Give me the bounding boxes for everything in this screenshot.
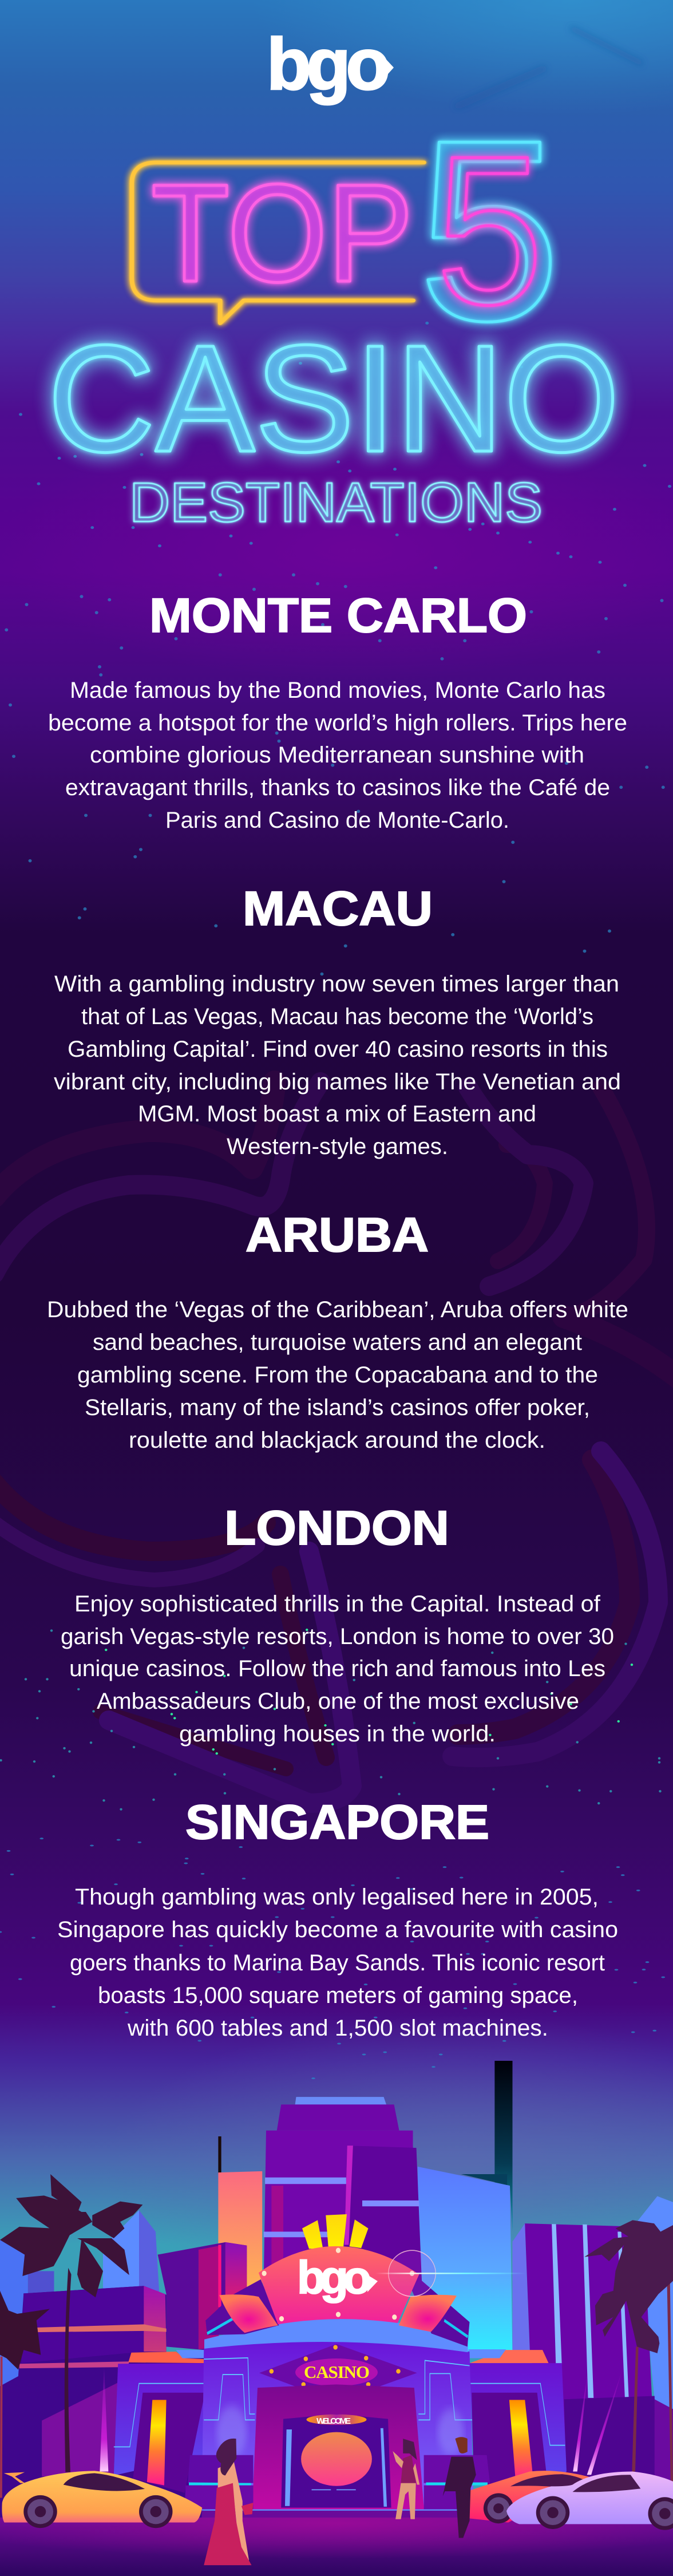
text block: Monte Carlo: extravagant thrills, thanks to casinos like the Café de: [65, 775, 610, 800]
text block: Aruba: sand beaches, turquoise waters and an elegant: [93, 1330, 582, 1355]
title: neon sign: [47, 87, 620, 534]
text block: Aruba: gambling scene. From the Copacabana and to the: [77, 1362, 598, 1388]
swirl pattern: [0, 1082, 673, 1803]
number 5 inner line: 5: [436, 112, 543, 348]
DESTINATIONS: DESTINATIONS: [129, 471, 543, 534]
TOP: TOP: [151, 156, 413, 311]
steps: [184, 2455, 490, 2519]
number 5: 5: [418, 87, 561, 374]
car: yellow: [2, 2471, 202, 2528]
text block: Aruba: roulette and blackjack around the clock.: [129, 1428, 545, 1453]
palm trees right: [584, 2220, 673, 2482]
illustration: casino street scene: [0, 2061, 673, 2576]
section: Aruba: [47, 1208, 628, 1453]
text block: London: Ambassadeurs Club, one of the most exclusive: [97, 1689, 579, 1714]
text block: Monte Carlo: [48, 678, 627, 833]
left block: [0, 2286, 204, 2521]
heading: Monte Carlo: MONTE CARLO: [149, 588, 527, 642]
text block: Monte Carlo: Paris and Casino de Monte-Carlo.: [165, 808, 509, 833]
text block: Singapore: boasts 15,000 square meters of gaming space,: [98, 1983, 578, 2008]
far buildings: [0, 2136, 262, 2389]
sign studs: [262, 2248, 414, 2321]
sign text: CASINO: CASINO: [304, 2362, 370, 2382]
text block: London: Enjoy sophisticated thrills in the Capital. Instead of: [74, 1591, 601, 1617]
text block: Aruba: [47, 1297, 628, 1453]
entrance: [252, 2384, 424, 2510]
text block: Macau: vibrant city, including big names like The Venetian and: [54, 1069, 621, 1095]
text block: Singapore: [57, 1884, 618, 2041]
man in dark suit: [443, 2437, 476, 2538]
car: red: [468, 2471, 594, 2523]
casino diamond: [259, 2344, 417, 2402]
text block: London: garish Vegas-style resorts, London is home to over 30: [61, 1624, 614, 1649]
logo: bgo: bgo: [267, 23, 390, 105]
text block: Macau: MGM. Most boast a mix of Eastern and: [138, 1101, 536, 1127]
text block: London: [61, 1591, 614, 1747]
section: Singapore: [57, 1795, 618, 2041]
sign board: [259, 2246, 419, 2324]
speech bubble outline: [132, 163, 424, 323]
heading: London: LONDON: [224, 1501, 449, 1555]
text block: Monte Carlo: combine glorious Mediterranean sunshine with: [90, 742, 584, 768]
text block: Macau: Western-style games.: [227, 1134, 448, 1159]
casino body: [201, 2317, 474, 2510]
star dots: [0, 323, 670, 2079]
text block: Macau: [54, 971, 621, 1159]
sign text: WELCOME: WELCOME: [316, 2416, 351, 2426]
text block: Singapore: with 600 tables and 1,500 slot machines.: [127, 2016, 548, 2041]
heading: Macau: MACAU: [243, 882, 433, 935]
text block: Monte Carlo: become a hotspot for the world’s high rollers. Trips here: [48, 710, 627, 736]
ground: [0, 2518, 673, 2576]
text block: Singapore: goers thanks to Marina Bay Sands. This iconic resort: [70, 1950, 605, 1976]
heading: Singapore: SINGAPORE: [185, 1795, 489, 1849]
text block: Monte Carlo: Made famous by the Bond movies, Monte Carlo has: [70, 678, 605, 703]
text block: London: unique casinos. Follow the rich and famous into Les: [69, 1656, 605, 1681]
text block: Macau: Gambling Capital’. Find over 40 casino resorts in this: [68, 1037, 608, 1062]
text block: London: gambling houses in the world.: [179, 1721, 496, 1747]
section: Macau: [54, 882, 621, 1159]
text block: Macau: that of Las Vegas, Macau has become the ‘World’s: [81, 1004, 593, 1029]
pods and petals: [205, 2279, 469, 2346]
text block: Aruba: Dubbed the ‘Vegas of the Caribbean’, Aruba offers white: [47, 1297, 628, 1322]
section: London: [61, 1501, 614, 1747]
palm tree left small: [0, 2291, 50, 2498]
sign logo: bgo: bgo: [297, 2252, 371, 2304]
section: Monte Carlo: [48, 588, 627, 833]
lens flare: [375, 2250, 526, 2297]
text block: Singapore: Though gambling was only legalised here in 2005,: [75, 1884, 599, 1910]
text block: Macau: With a gambling industry now seven times larger than: [54, 971, 619, 997]
text block: Aruba: Stellaris, many of the island’s casinos offer poker,: [85, 1395, 590, 1420]
right far buildings: [418, 2061, 673, 2484]
heading: Aruba: ARUBA: [246, 1208, 429, 1262]
text block: Singapore: Singapore has quickly become a favourite with casino: [57, 1917, 618, 1942]
sign fins: [302, 2214, 369, 2249]
woman in purple dress: [393, 2439, 419, 2519]
main tower: [263, 2097, 422, 2291]
car: white: [506, 2472, 673, 2530]
CASINO: CASINO: [47, 314, 620, 484]
palm tree left large: [0, 2174, 142, 2472]
wings and doors: [114, 2349, 567, 2493]
woman in red dress: [204, 2439, 253, 2565]
